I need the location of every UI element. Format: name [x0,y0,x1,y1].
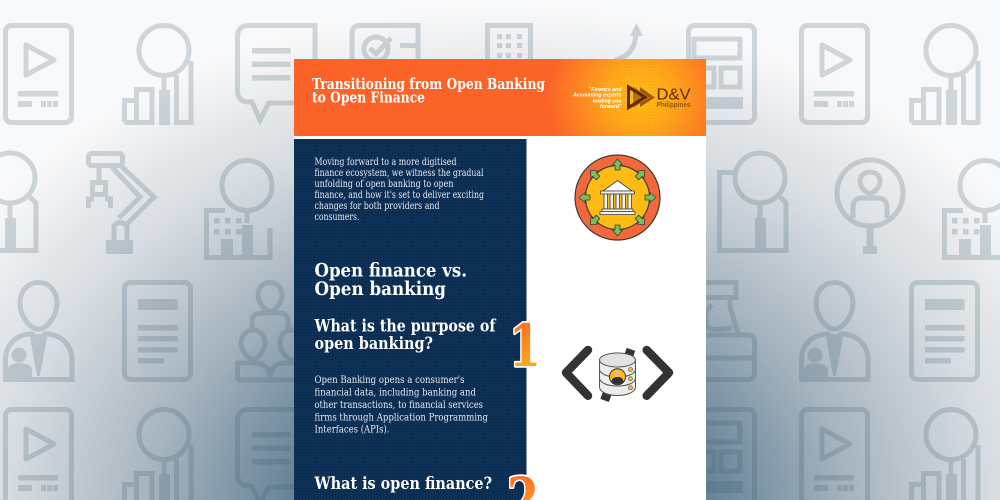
intro paragraph [314,157,484,223]
number 1 badge: 1 [509,312,541,380]
tagline: forward" [600,104,622,110]
question 1 heading: What is the purpose of [314,316,496,336]
question 1 answer: other transactions, to financial services [314,400,483,411]
section heading: Open banking [314,278,446,300]
icon: play document r1 b [802,26,868,122]
icon: magnifier document r2 right [720,153,786,253]
question 1 answer: Open Banking opens a consumer's [314,375,464,386]
icon: play document r1 [6,26,72,122]
intro paragraph: finance, and how it's set to deliver exciting [314,190,484,201]
icon: database with code brackets [566,348,669,402]
icon: magnifier chart r4 [124,410,191,500]
question 1 answer: financial data, including banking and [314,388,476,398]
icon: group of people [238,282,300,380]
icon: suited person r3 [6,282,72,382]
navy content panel [294,139,526,500]
question 1 heading [314,316,496,353]
tagline: "Finance and [589,87,622,93]
icon: person in magnifier [837,160,903,254]
icon: layout document r4 [688,410,754,500]
intro paragraph: finance ecosystem, we witness the gradual [314,168,484,179]
question 1 heading: open banking? [314,334,433,353]
icon: building top [488,26,530,60]
icon: speech bubble r4 [238,410,315,500]
icon: bank with arrows [575,155,660,240]
question 1 answer [314,375,488,436]
title [312,76,545,106]
question 1 answer: firms through Application Programming [314,412,488,423]
icon: magnifier building r2 [206,160,272,260]
icon: magnifier document r2 left [0,153,36,253]
intro paragraph: Moving forward to a more digitised [314,157,456,168]
header banner [294,59,706,136]
icon: suited person r3 b [802,282,868,382]
logo: D&V Philippines: D&V [656,86,691,104]
section heading: Open finance vs. [314,260,467,282]
intro paragraph: unfolding of open banking to open [314,179,454,190]
icon: robot arm [88,154,154,254]
tagline [572,87,622,110]
logo: D&V Philippines: Philippines [656,102,691,109]
question 2 heading: What is open finance? [314,474,492,493]
logo: D&V Philippines [628,86,691,109]
icon: check card [352,26,418,61]
intro paragraph: consumers. [314,212,360,223]
icon: magnifier chart r1 b [912,26,978,125]
icon: layout document r1 [688,26,754,122]
question 1 answer: Interfaces (APIs). [314,425,390,436]
icon: text document r3 [124,282,190,380]
icon: magnifier chart r4 b [912,410,978,500]
icon: text document r3 b [912,282,978,380]
section heading [314,260,467,300]
icon: play document r4 [6,410,72,500]
icon: magnifier building r2 right [944,160,1000,260]
icon: magnifier chart r1 [124,26,191,125]
icon: growth arrow [615,23,643,60]
infographic page [294,59,706,500]
title: Transitioning from Open Banking [312,76,545,93]
tagline: Accounting experts [572,92,622,98]
icon: hand and box [700,282,754,380]
title: to Open Finance [312,90,425,106]
icon: speech bubble r1 [238,26,315,120]
intro paragraph: changes for both providers and [314,201,440,212]
tagline: leading you [593,98,622,104]
icon: play document r4 b [802,410,868,500]
